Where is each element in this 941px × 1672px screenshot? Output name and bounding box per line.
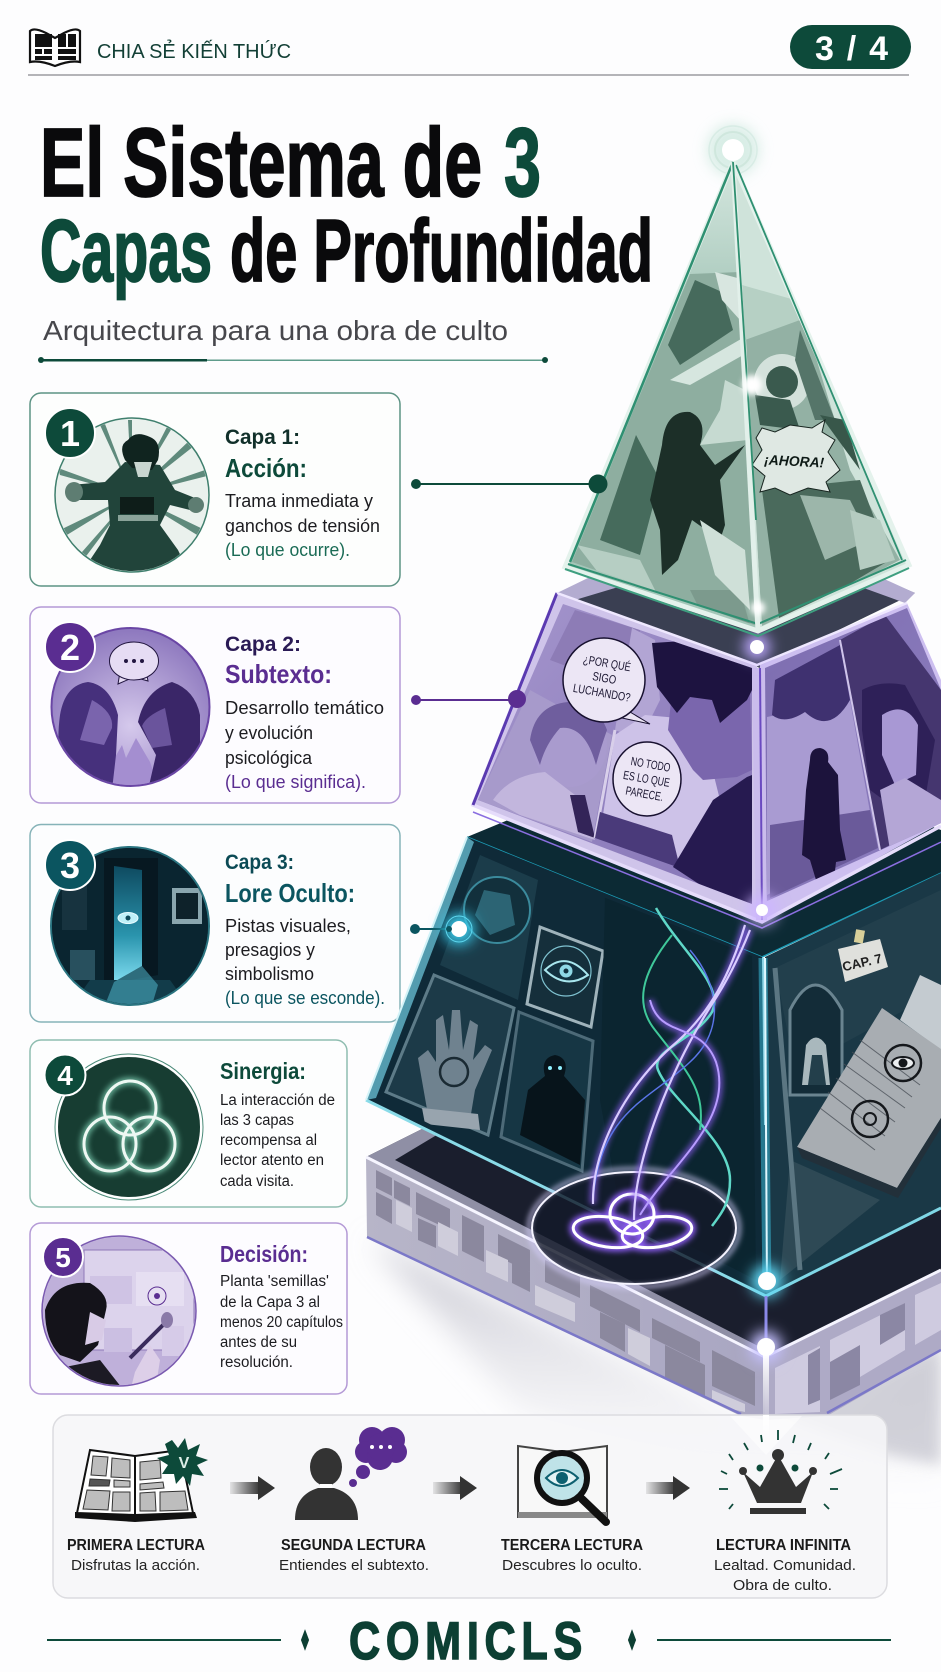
- capa 2 text: Capa 2:: [225, 633, 301, 656]
- capa 1 text: [225, 426, 380, 560]
- portrait: three rings: [55, 1054, 203, 1200]
- energy helix strands: [593, 908, 750, 1226]
- node: purple bottom: [747, 895, 777, 925]
- step 1 text: [67, 1537, 205, 1574]
- purple left face: [473, 593, 757, 922]
- title: Capas: [40, 201, 212, 300]
- title: de Profundidad: [230, 201, 653, 300]
- green edges: [565, 162, 909, 631]
- decision text: Decisión:: [220, 1241, 308, 1267]
- panel: capa 3 lore oculto: [30, 824, 400, 1022]
- title: [40, 108, 653, 300]
- thought cloud: [349, 1427, 407, 1487]
- decision text: Planta 'semillas': [220, 1273, 329, 1290]
- purple right face: [760, 603, 941, 922]
- capa 3 text: (Lo que se esconde).: [225, 988, 385, 1008]
- base right strip: [765, 1270, 941, 1420]
- sinergia text: La interacción de: [220, 1092, 335, 1109]
- blue ridge: [763, 958, 767, 1290]
- panel: reading progression: [53, 1415, 887, 1598]
- badge 3: 3: [60, 845, 80, 886]
- base top surface: [366, 1125, 941, 1357]
- capa 3 text: Capa 3:: [225, 851, 294, 874]
- base edge highlights: [366, 1157, 941, 1357]
- capa 1 text: ganchos de tensión: [225, 516, 380, 536]
- blue left face: [366, 837, 766, 1296]
- icon: crown with rays: [719, 1430, 842, 1514]
- capa 2 text: Subtexto:: [225, 659, 332, 689]
- step 3 text: TERCERA LECTURA: [501, 1537, 643, 1554]
- green left face: [568, 174, 756, 628]
- capa 3 text: [225, 851, 385, 1008]
- purple top surface: [557, 578, 915, 668]
- capa 3 text: Lore Oculto:: [225, 878, 355, 908]
- panel: sinergia: [30, 1040, 347, 1207]
- badge 4: [44, 1054, 86, 1096]
- panel: decision: [30, 1223, 347, 1394]
- sinergia text: lector atento en: [220, 1152, 324, 1169]
- pyramid: ground shadow: [370, 1240, 941, 1480]
- capa 1 text: Trama inmediata y: [225, 491, 373, 511]
- green right face: [733, 162, 909, 631]
- badge 5: [43, 1237, 83, 1277]
- step 4 text: [714, 1537, 856, 1594]
- speech bubble: no todo: ES LO QUE: [622, 768, 671, 790]
- capa 2 text: [225, 633, 384, 792]
- decision text: resolución.: [220, 1354, 293, 1371]
- arrow 1: [230, 1476, 275, 1500]
- panel: capa 2 subtexto: [30, 607, 400, 803]
- sinergia text: Sinergia:: [220, 1058, 306, 1084]
- capa 1 text: Capa 1:: [225, 426, 300, 449]
- footer brand: [47, 1612, 891, 1671]
- step 4 text: Obra de culto.: [733, 1578, 832, 1594]
- header label: CHIA SẺ KIẾN THỨC: [97, 40, 291, 63]
- page counter pill: [790, 25, 911, 69]
- speech bubble: no todo: NO TODO: [630, 754, 672, 775]
- capa 3 text: Pistas visuales,: [225, 916, 351, 936]
- speech bubble: [110, 642, 158, 684]
- connector: capa 1: [411, 474, 608, 494]
- decision text: [220, 1241, 343, 1371]
- badge 1: [45, 408, 95, 458]
- title: El Sistema de: [40, 108, 482, 217]
- step 4 text: Lealtad. Comunidad.: [714, 1558, 856, 1574]
- node: blue corner: [751, 1265, 783, 1297]
- energy disc with triquetra: [529, 1169, 739, 1287]
- connector: capa 2: [411, 690, 526, 708]
- panel: capa 1 accion: [30, 393, 400, 586]
- capa 2 text: y evolución: [225, 723, 313, 743]
- blue right face: [765, 873, 941, 1296]
- halo at apex: [707, 124, 759, 176]
- icon: open comic book: V: [179, 1455, 190, 1472]
- node: purple top: [744, 634, 770, 660]
- icon: magnifier over book: [518, 1446, 607, 1522]
- speech bubble: por que: LUCHANDO?: [572, 681, 632, 705]
- sinergia text: cada visita.: [220, 1173, 294, 1190]
- portrait: two characters: [52, 628, 215, 790]
- step 3 text: Descubres lo oculto.: [502, 1558, 642, 1574]
- page counter pill: 3 / 4: [815, 30, 888, 68]
- badge 1: 1: [60, 413, 80, 454]
- subtitle: Arquitectura para una obra de culto: [43, 315, 508, 346]
- blue top surface: [467, 815, 941, 957]
- decision text: antes de su: [220, 1334, 297, 1351]
- icon: thinking person: [295, 1427, 407, 1520]
- badge 2: 2: [60, 627, 80, 668]
- sinergia text: [220, 1058, 335, 1190]
- header: [28, 25, 911, 76]
- portrait: action hero: [55, 418, 209, 575]
- pyramid: base layer: [366, 1125, 941, 1420]
- wordmark: COMICLS: [349, 1612, 588, 1671]
- portrait: planner at board: [40, 1236, 200, 1392]
- step 2 text: SEGUNDA LECTURA: [281, 1537, 426, 1554]
- badge 5: 5: [55, 1242, 71, 1273]
- speech burst: ahora: [752, 420, 840, 495]
- step 1 text: Disfrutas la acción.: [71, 1558, 200, 1574]
- title: 3: [504, 108, 541, 217]
- connector: capa 3: [410, 913, 475, 945]
- speech bubble: por que: ¿POR QUÉ: [582, 651, 632, 674]
- sinergia text: las 3 capas: [220, 1112, 294, 1129]
- speech bubble: por que: SIGO: [591, 669, 617, 687]
- step 1 text: PRIMERA LECTURA: [67, 1537, 205, 1554]
- badge 4: 4: [57, 1060, 73, 1091]
- badge 2: [45, 622, 95, 672]
- capa 3 text: simbolismo: [225, 964, 314, 984]
- note: cap 7: CAP. 7: [841, 951, 883, 974]
- decision text: de la Capa 3 al: [220, 1294, 320, 1311]
- capa 1 text: Acción:: [225, 453, 307, 483]
- badge 3: [45, 840, 95, 890]
- pyramid: purple layer subtexto: [473, 577, 941, 928]
- purple outline: [473, 593, 941, 922]
- icon: open comic book: [75, 1438, 208, 1522]
- decision text: menos 20 capítulos: [220, 1314, 343, 1331]
- pyramid: blue layer lore oculto: [366, 815, 941, 1440]
- step 2 text: [279, 1537, 429, 1574]
- step 4 text: LECTURA INFINITA: [716, 1537, 851, 1554]
- capa 2 text: Desarrollo temático: [225, 698, 384, 718]
- arrow 3: [646, 1476, 690, 1500]
- speech bubble: por que: [563, 638, 650, 724]
- base left strip: [366, 1157, 765, 1420]
- capa 1 text: (Lo que ocurre).: [225, 540, 350, 560]
- subtitle divider: [38, 357, 548, 363]
- sinergia text: recompensa al: [220, 1132, 317, 1149]
- capa 2 text: (Lo que significa).: [225, 772, 366, 792]
- pyramid: green layer accion: [560, 124, 909, 640]
- note: cap 7: [838, 929, 888, 982]
- icon: open book logo: [30, 29, 80, 66]
- capa 2 text: psicológica: [225, 748, 313, 768]
- arrow 2: [433, 1476, 477, 1500]
- speech bubble: no todo: [613, 742, 681, 816]
- step 3 text: [501, 1537, 643, 1574]
- speech burst: ahora: ¡AHORA!: [764, 451, 825, 471]
- speech bubble: no todo: PARECE.: [624, 784, 664, 804]
- portrait: hidden door: [51, 847, 209, 1008]
- node: base corner: [750, 1331, 782, 1363]
- step 2 text: Entiendes el subtexto.: [279, 1558, 429, 1574]
- capa 3 text: presagios y: [225, 940, 315, 960]
